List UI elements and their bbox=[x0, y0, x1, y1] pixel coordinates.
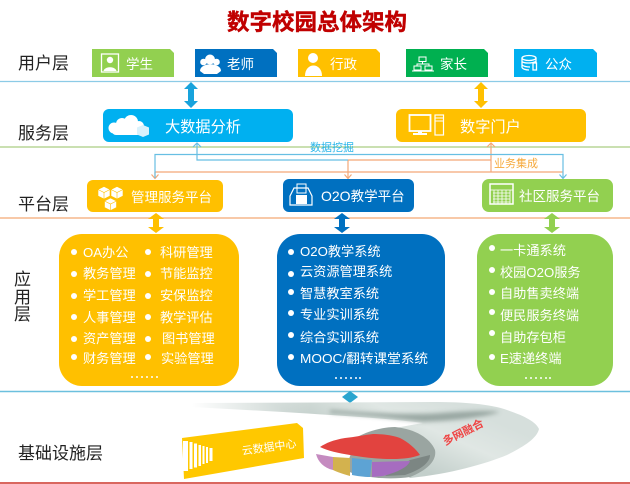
panel: management applications: 财务管理 bbox=[83, 351, 136, 366]
cable core: yellow bbox=[333, 457, 350, 476]
connector lines: business integration bbox=[152, 143, 563, 178]
card: public bbox=[514, 49, 597, 77]
card: administration bbox=[298, 49, 380, 77]
multi-network cable graphic bbox=[192, 401, 539, 478]
service box: digital portal: 数字门户 bbox=[460, 119, 521, 136]
panel: teaching applications: 智慧教室系统 bbox=[300, 285, 379, 301]
panel: management applications: 实验管理 bbox=[161, 351, 214, 366]
panel: management applications: 教务管理 bbox=[83, 266, 136, 281]
cable inner ring bbox=[345, 427, 435, 478]
label: service layer: 服务层 bbox=[18, 124, 69, 143]
panel: teaching applications bbox=[277, 234, 445, 386]
service box: big data analysis bbox=[103, 109, 293, 142]
panel: teaching applications: 综合实训系统 bbox=[300, 330, 379, 345]
card: administration: 行政 bbox=[330, 57, 357, 72]
platform box: management services bbox=[87, 180, 223, 212]
cable core: purple bbox=[316, 454, 333, 470]
panel: community applications: 校园O2O服务 bbox=[500, 264, 581, 280]
service box: big data analysis: 大数据分析 bbox=[165, 119, 241, 136]
arrow: users to big data bbox=[184, 82, 198, 108]
cable jacket and tail bbox=[192, 402, 539, 478]
platform box: O2O teaching bbox=[283, 179, 414, 212]
ellipsis bbox=[131, 376, 158, 378]
card: teacher bbox=[195, 49, 277, 77]
service box: digital portal bbox=[396, 109, 586, 142]
card: parents: 家长 bbox=[440, 56, 467, 72]
platform box: management services: 管理服务平台 bbox=[131, 190, 212, 205]
cable core: red bbox=[320, 434, 420, 459]
label: application layer: 应 bbox=[14, 270, 31, 289]
arrow: users to portal bbox=[474, 82, 488, 108]
platform box: community services: 社区服务平台 bbox=[519, 189, 600, 204]
cable core: violet bbox=[372, 461, 410, 477]
label: application layer: 层 bbox=[14, 305, 31, 324]
panel: community applications: 自助存包柜 bbox=[500, 330, 566, 345]
panel: management applications: 图书管理 bbox=[162, 331, 215, 346]
card: parents bbox=[406, 49, 488, 77]
panel: teaching applications: 云资源管理系统 bbox=[300, 264, 392, 279]
panel: management applications: 教学评估 bbox=[160, 310, 213, 325]
card: teacher: 老师 bbox=[227, 57, 254, 72]
user layer cards bbox=[92, 49, 597, 77]
arrows: platform to application bbox=[148, 213, 560, 233]
label: platform layer: 平台层 bbox=[18, 195, 69, 214]
icon: connector diamond bbox=[342, 391, 358, 403]
cloud data center banner bbox=[182, 423, 304, 479]
panel: management applications: 人事管理 bbox=[83, 310, 136, 325]
panel: community applications: 便民服务终端 bbox=[500, 308, 579, 323]
panel: management applications: 资产管理 bbox=[83, 331, 136, 346]
panel: management applications: 安保监控 bbox=[160, 288, 213, 303]
panel: community applications: 一卡通系统 bbox=[500, 243, 566, 258]
panel: teaching applications: O2O教学系统 bbox=[300, 244, 381, 259]
label: data mining: 数据挖掘 bbox=[310, 140, 354, 154]
panel: community applications: E速递终端 bbox=[500, 351, 562, 366]
card: student bbox=[92, 49, 174, 77]
label: application layer: 用 bbox=[14, 288, 31, 307]
platform box: O2O teaching: O2O教学平台 bbox=[321, 188, 405, 204]
panel: teaching applications: MOOC/翻转课堂系统 bbox=[300, 351, 428, 366]
connector lines: data mining bbox=[155, 143, 566, 178]
cable core: blue bbox=[352, 458, 372, 477]
label: infrastructure layer: 基础设施层 bbox=[18, 444, 103, 463]
card: public: 公众 bbox=[545, 57, 572, 72]
panel: community applications: 自助售卖终端 bbox=[500, 286, 579, 301]
panel: community applications bbox=[477, 234, 613, 386]
ellipsis bbox=[335, 377, 361, 379]
panel: management applications: OA办公 bbox=[83, 245, 128, 260]
title: 数字校园总体架构 bbox=[227, 9, 407, 35]
label: application layer bbox=[14, 270, 31, 324]
label: user layer: 用户层 bbox=[18, 54, 69, 73]
label: business integration: 业务集成 bbox=[494, 156, 538, 170]
panel: management applications: 节能监控 bbox=[160, 266, 213, 281]
cable label: 多网融合 bbox=[440, 416, 486, 448]
platform box: community services bbox=[482, 179, 613, 212]
panel: management applications: 学工管理 bbox=[83, 288, 136, 303]
panel: management applications: 科研管理 bbox=[160, 245, 213, 260]
panel: management applications bbox=[59, 234, 239, 386]
cloud data center banner: 云数据中心 bbox=[241, 436, 297, 458]
layer labels bbox=[14, 54, 103, 463]
panel: teaching applications: 专业实训系统 bbox=[300, 307, 379, 322]
card: student: 学生 bbox=[126, 57, 153, 72]
ellipsis bbox=[525, 377, 551, 379]
